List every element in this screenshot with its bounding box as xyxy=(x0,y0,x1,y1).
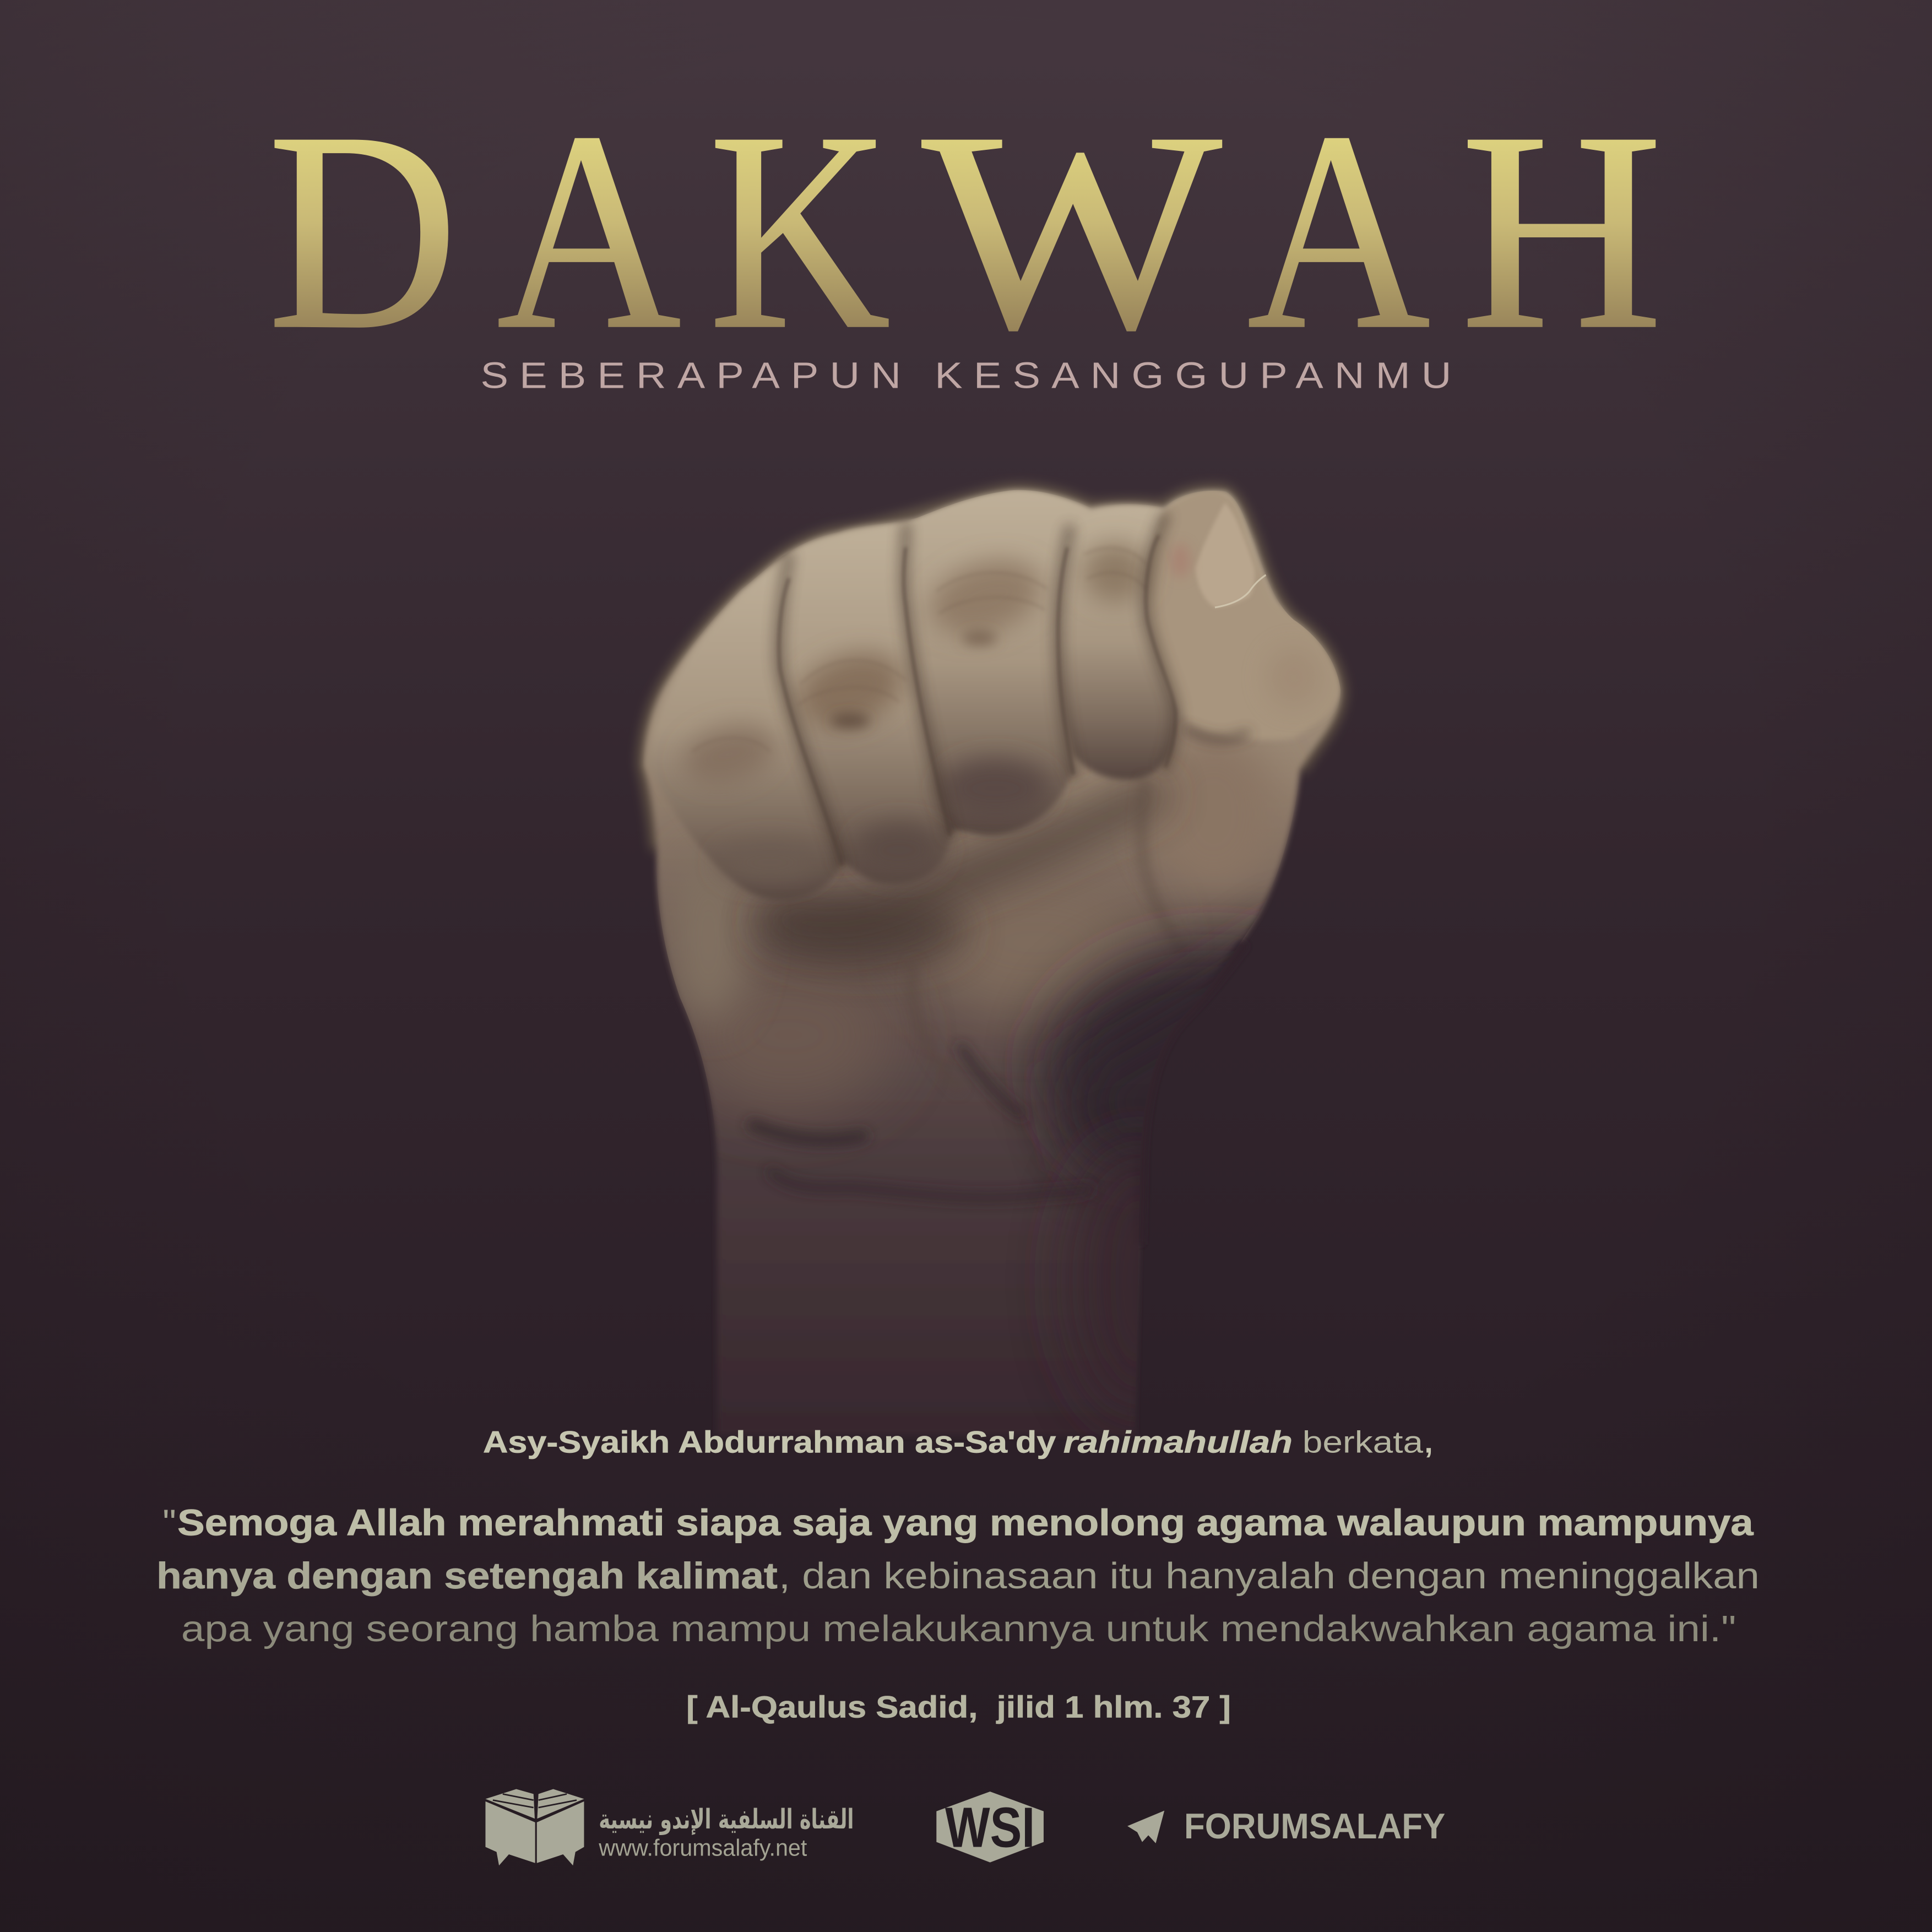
thumb pink tip xyxy=(1170,544,1190,578)
title: DAKWAH: A xyxy=(497,73,681,388)
palm crease xyxy=(911,961,961,1090)
title: DAKWAH: K xyxy=(708,73,891,388)
icon: WSI hexagon logo: WSI xyxy=(945,1796,1035,1859)
icon: telegram plane xyxy=(1127,1811,1164,1843)
fingers xyxy=(647,490,1176,899)
finger creases xyxy=(779,536,1175,865)
cuticle line xyxy=(1215,572,1272,607)
lower right shadow xyxy=(1048,949,1380,1183)
quote text: apa yang seorang hamba mampu melakukannya untuk mendakwahkan agama ini." xyxy=(181,1608,1736,1649)
wrist right shade xyxy=(1072,1146,1207,1417)
attribution line: berkata xyxy=(1303,1425,1424,1459)
thumb nail xyxy=(1195,503,1255,607)
website url: www.forumsalafy.net xyxy=(598,1835,807,1861)
title: DAKWAH: D xyxy=(267,73,458,388)
quote text: " xyxy=(162,1502,176,1544)
left edge lit area xyxy=(666,850,750,1023)
finger creases soft xyxy=(779,518,1175,865)
knuckle dimples xyxy=(831,631,997,728)
palm lit area xyxy=(927,910,1136,1032)
title: DAKWAH: H xyxy=(1460,73,1663,388)
footer logos xyxy=(485,1789,1445,1865)
forum name: FORUMSALAFY xyxy=(1184,1806,1445,1846)
right edge rim fade xyxy=(1138,942,1245,1245)
knuckles xyxy=(677,544,1147,793)
attribution line: , xyxy=(1424,1425,1433,1459)
title: DAKWAH xyxy=(267,73,1663,388)
quote text: Semoga Allah merahmati siapa saja yang menolong agama walaupun mampunya xyxy=(177,1502,1754,1544)
fist glow halo xyxy=(643,490,1341,850)
title: DAKWAH: W xyxy=(921,73,1225,388)
hand shading xyxy=(655,490,1341,1361)
citation: [ Al-Qaulus Sadid, jilid 1 hlm. 37 ] xyxy=(686,1690,1231,1724)
quote text xyxy=(156,1502,1760,1649)
finger lower shade xyxy=(941,759,1050,818)
under-finger shadow xyxy=(758,896,967,965)
icon: open book xyxy=(485,1789,584,1865)
heel of hand lit area xyxy=(687,1001,885,1122)
hand base xyxy=(643,490,1341,1435)
attribution line: Asy-Syaikh Abdurrahman as-Sa'dy xyxy=(483,1425,1056,1459)
thumb underside crease xyxy=(1185,728,1250,739)
arabic channel name: القناة السلفية الإندو نيسية xyxy=(599,1803,854,1836)
attribution line xyxy=(483,1425,1433,1459)
thumb xyxy=(1147,489,1339,740)
quote text: , dan kebinasaan itu hanyalah dengan meninggalkan xyxy=(779,1555,1760,1597)
knuckle wrinkles xyxy=(692,548,1146,752)
quote text: hanya dengan setengah kalimat xyxy=(156,1555,778,1597)
thumb joint shade xyxy=(1267,648,1321,707)
title: DAKWAH: A xyxy=(1247,73,1430,388)
thumb base crease xyxy=(1141,779,1190,964)
photo: raised fist xyxy=(643,489,1380,1435)
subtitle: SEBERAPAPUN KESANGGUPANMU xyxy=(481,355,1463,397)
attribution line: rahimahullah xyxy=(1063,1425,1293,1459)
wrist creases xyxy=(753,1048,1090,1198)
thenar lit area xyxy=(1149,733,1278,893)
